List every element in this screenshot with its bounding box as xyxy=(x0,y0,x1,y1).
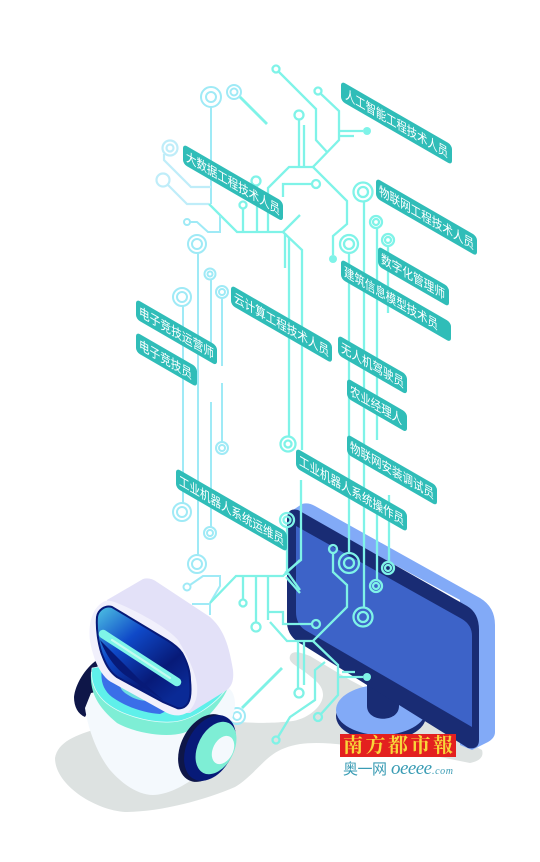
label: AI engineer xyxy=(341,81,452,165)
label: BIM technician: 建筑信息模型技术员 xyxy=(344,264,438,333)
newspaper logo: 南方都市報 xyxy=(343,733,453,757)
label: drone pilot: 无人机驾驶员 xyxy=(341,340,404,391)
mint collar xyxy=(91,650,227,735)
robot xyxy=(74,578,246,795)
head front xyxy=(89,601,197,715)
ground shadow xyxy=(55,652,482,812)
label: cloud engineer xyxy=(231,285,332,363)
central circuits xyxy=(240,66,371,593)
left circuits xyxy=(156,85,283,573)
newspaper logo xyxy=(340,733,456,779)
label: farm manager: 农业经理人 xyxy=(350,383,402,428)
cyan collar xyxy=(92,650,227,722)
label: big data engineer xyxy=(183,144,283,222)
label: AI engineer: 人工智能工程技术人员 xyxy=(345,86,448,161)
blue neck xyxy=(101,660,190,714)
left wheel xyxy=(74,660,100,717)
monitor xyxy=(287,503,495,750)
label: IoT installer xyxy=(347,434,437,506)
label: esports operator: 电子竞技运营师 xyxy=(139,304,214,362)
monitor screen xyxy=(296,526,472,727)
label: IoT engineer xyxy=(376,178,477,256)
label: esports player: 电子竞技员 xyxy=(139,337,192,382)
monitor bezel xyxy=(287,509,479,748)
label: robot maintainer: 工业机器人系统运维员 xyxy=(179,473,284,548)
right circuits xyxy=(339,182,394,626)
label: robot operator: 工业机器人系统操作员 xyxy=(299,453,404,528)
label: digital manager: 数字化管理师 xyxy=(381,251,445,302)
body xyxy=(85,680,235,795)
visor light bar xyxy=(103,634,177,682)
visor xyxy=(97,607,191,708)
newspaper logo: oeeee xyxy=(391,758,432,779)
label: IoT installer: 物联网安装调试员 xyxy=(350,439,434,502)
monitor stand xyxy=(336,670,426,741)
lower circuits xyxy=(184,545,371,744)
head back xyxy=(107,578,233,713)
label: robot operator xyxy=(296,448,407,532)
newspaper logo: .com xyxy=(432,766,453,777)
label: cloud engineer: 云计算工程技术人员 xyxy=(234,290,329,359)
label: big data engineer: 大数据工程技术人员 xyxy=(186,149,280,218)
label: IoT engineer: 物联网工程技术人员 xyxy=(379,183,474,252)
job labels xyxy=(136,81,477,552)
right wheel xyxy=(167,705,246,791)
circuit lines xyxy=(156,66,394,744)
pale neck highlight xyxy=(118,680,152,704)
newspaper logo: 奥一网 xyxy=(343,761,387,778)
monitor back xyxy=(293,503,495,750)
label: robot maintainer xyxy=(176,468,287,552)
